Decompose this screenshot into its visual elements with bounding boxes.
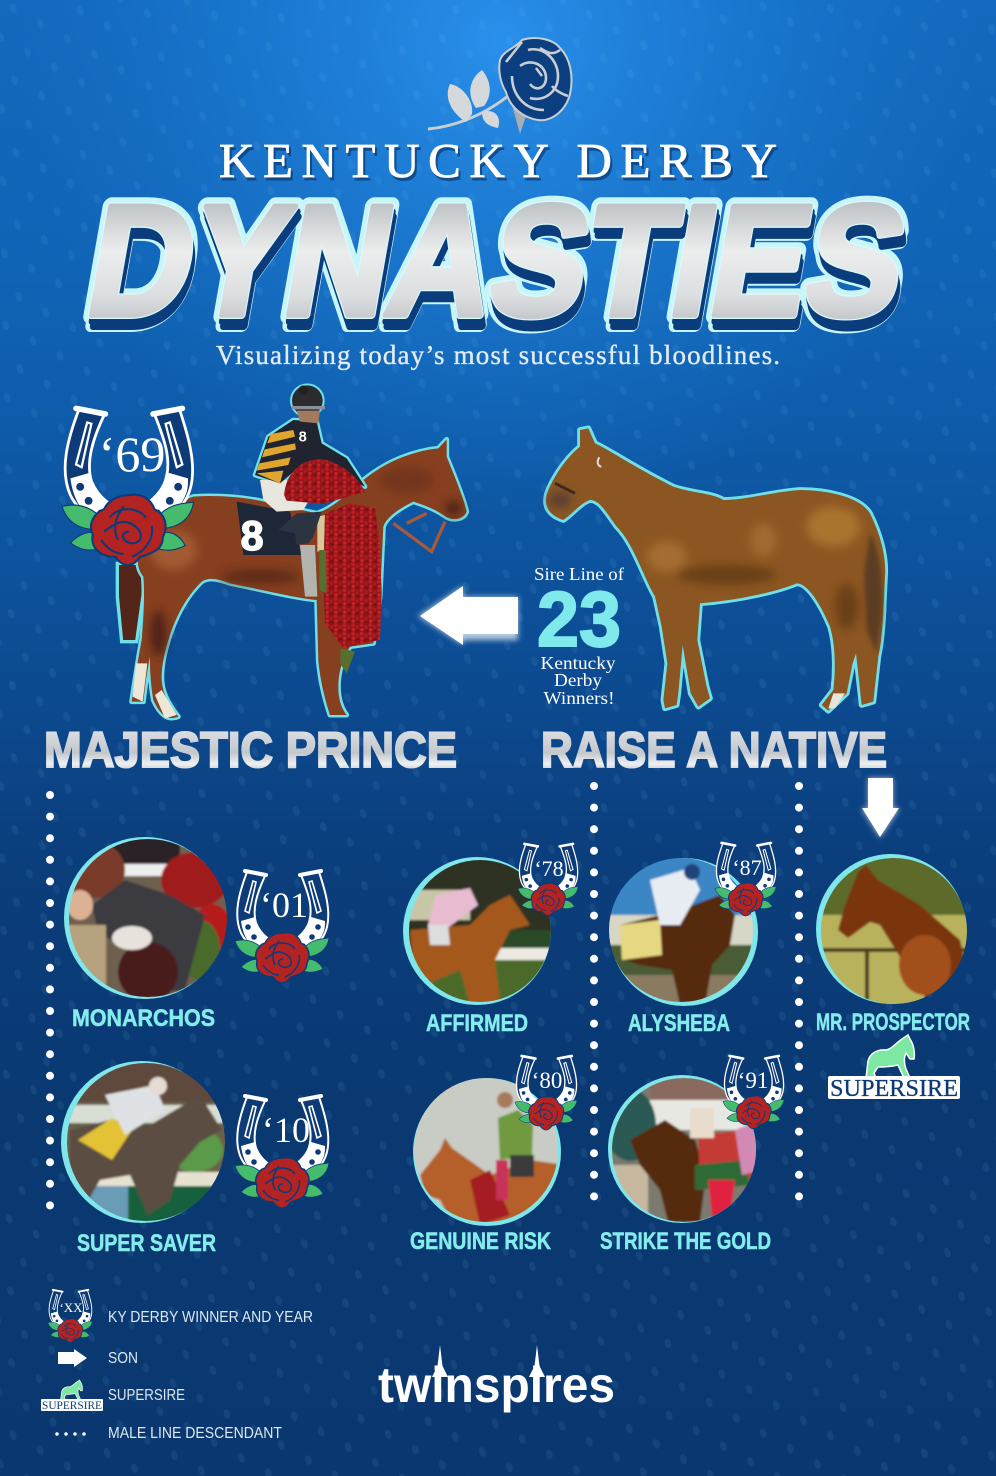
legend icon: supersire	[41, 1380, 103, 1412]
tail	[117, 563, 143, 642]
shading	[548, 492, 860, 630]
heading: Majestic Prince: MAJESTIC PRINCE	[44, 722, 457, 778]
legend text: winner: KY DERBY WINNER AND YEAR	[108, 1309, 313, 1326]
heading: Raise a Native: RAISE A NATIVE	[541, 722, 887, 778]
legend text: male line: MALE LINE DESCENDANT	[108, 1425, 282, 1442]
callout: sire line of 23: Kentucky	[540, 653, 616, 673]
label: Genuine Risk: GENUINE RISK	[410, 1228, 552, 1255]
callout: sire line of 23: Derby	[554, 670, 602, 690]
badge: Genuine Risk 1980	[515, 1056, 577, 1130]
jockey	[255, 385, 365, 545]
horse: Raise a Native	[546, 428, 885, 711]
photo: Genuine Risk	[410, 1075, 565, 1230]
girth	[300, 545, 317, 597]
year label: ‘78	[534, 856, 564, 881]
legend icon: derby winner badge: ‘XX	[59, 1300, 83, 1315]
photo: Affirmed	[403, 857, 551, 1005]
icon: navy rose with silver leaves	[428, 38, 572, 134]
year label: ‘91	[738, 1068, 768, 1093]
title: Dynasties: DYNASTIES	[78, 183, 921, 360]
photo: Monarchos	[64, 837, 227, 999]
legend icon: derby winner badge	[48, 1290, 92, 1342]
photo: Super Saver	[60, 1060, 230, 1230]
body shading	[150, 467, 461, 657]
photo: Alysheba	[609, 858, 758, 1006]
title: Dynasties: DYNASTIES	[76, 172, 919, 349]
legend icon: son arrow	[58, 1349, 87, 1367]
number 8: 8	[241, 513, 264, 559]
dotted line: Raise a Native descendants 2	[795, 786, 803, 1197]
photo: Mr. Prospector	[815, 854, 975, 1010]
body	[132, 439, 467, 718]
year label: ‘80	[532, 1068, 562, 1093]
icon: Supersire badge	[828, 1035, 960, 1102]
dotted line: Majestic Prince descendants	[46, 795, 54, 1206]
reins	[393, 513, 445, 552]
logo: twinspires: twinspires	[378, 1357, 615, 1413]
badge label: SUPERSIRE	[830, 1076, 958, 1102]
horse: Majestic Prince with jockey	[117, 385, 467, 718]
year label: ‘10	[262, 1110, 310, 1150]
label: Strike the Gold: STRIKE THE GOLD	[600, 1228, 771, 1255]
legend text: son: SON	[108, 1350, 138, 1367]
photo: Strike the Gold	[604, 1075, 765, 1225]
label: Affirmed: AFFIRMED	[426, 1010, 528, 1037]
subtitle: Visualizing today’s most successful bloodlines.	[216, 340, 780, 370]
badge: Affirmed 1978	[518, 844, 578, 916]
jockey: 8	[299, 430, 307, 446]
label: Monarchos: MONARCHOS	[72, 1005, 215, 1032]
year label: ‘01	[260, 885, 308, 925]
legend icon: dots	[57, 1432, 85, 1436]
label: Super Saver: SUPER SAVER	[77, 1230, 216, 1257]
legs socks	[133, 663, 177, 718]
callout: sire line of 23	[534, 564, 624, 708]
tail over body	[864, 533, 882, 653]
legend	[41, 1290, 313, 1442]
legend text: supersire: SUPERSIRE	[108, 1387, 185, 1404]
year label: ‘69	[99, 426, 165, 482]
title: Dynasties: DYNASTIES	[76, 172, 919, 349]
rose garland	[323, 503, 382, 648]
legend icon: supersire: SUPERSIRE	[42, 1400, 102, 1412]
callout: sire line of 23: Winners!	[544, 688, 614, 708]
title: Dynasties: DYNASTIES	[76, 182, 919, 359]
callout: sire line of 23: Sire Line of	[534, 564, 624, 584]
label: Alysheba: ALYSHEBA	[628, 1010, 730, 1037]
tail	[863, 533, 884, 657]
dotted line: Raise a Native descendants 1	[590, 786, 598, 1197]
title: Dynasties: DYNASTIES	[76, 172, 919, 349]
body	[546, 428, 885, 711]
badge: 1969 winner	[62, 408, 194, 565]
badge: Super Saver 2010	[235, 1096, 329, 1208]
callout: sire line of 23: 23	[537, 575, 621, 663]
arrow: son, pointing left	[418, 586, 518, 645]
badge: Monarchos 2001	[235, 871, 329, 983]
arrow: son, pointing down	[861, 778, 900, 838]
year label: ‘87	[732, 855, 762, 880]
badge: Alysheba 1987	[715, 843, 776, 916]
title: Kentucky Derby: KENTUCKY DERBY	[221, 136, 779, 191]
badge: Strike the Gold 1991	[723, 1056, 784, 1129]
saddle cloth	[237, 502, 302, 555]
title: Dynasties: DYNASTIES	[77, 178, 920, 355]
title: Kentucky Derby: KENTUCKY DERBY	[219, 133, 777, 188]
